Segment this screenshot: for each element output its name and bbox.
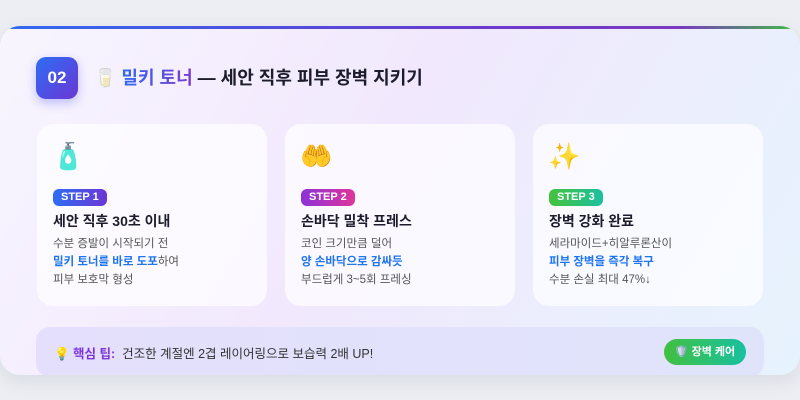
icon: palms: 🤲: [300, 141, 332, 171]
button: [664, 339, 746, 365]
step 3 text: 세라마이드+히알루론산이: [549, 238, 672, 250]
title: 🥛 밀키 토너 — 세안 직후 피부 장벽 지키기: [94, 68, 423, 88]
panel: step 3: [533, 124, 763, 306]
icon: lotion: 🧴: [52, 141, 84, 171]
step 2 text: [301, 237, 412, 286]
step 3 text: [549, 237, 672, 286]
step 3 badge: STEP 3: [557, 191, 595, 203]
step 1 text: [53, 237, 179, 286]
step 1 heading: 세안 직후 30초 이내: [53, 213, 170, 229]
step 1 badge: STEP 1: [61, 191, 99, 203]
tip text: 💡 핵심 팁: 건조한 계절엔 2겹 레이어링으로 보습력 2배 UP!: [54, 347, 373, 361]
button: 🛡️ 장벽 케어: [675, 346, 735, 358]
step 2 badge: [301, 189, 355, 206]
step 2 heading: 손바닥 밀착 프레스: [301, 213, 412, 229]
step 3 text: 수분 손실 최대 47%↓: [549, 274, 651, 286]
icon: sparkles: ✨: [548, 141, 580, 171]
panel: step 1: [37, 124, 267, 306]
step 2 text: 부드럽게 3~5회 프레싱: [301, 274, 412, 286]
number badge: 02: [48, 68, 66, 87]
step 1 text: 밀키 토너를 바로 도포하여: [53, 256, 179, 268]
step 2 badge: STEP 2: [309, 191, 347, 203]
step 3 heading: 장벽 강화 완료: [549, 213, 634, 229]
step 3 badge: [549, 189, 603, 206]
step 1 text: 수분 증발이 시작되기 전: [53, 238, 168, 250]
step 2 text: 코인 크기만큼 덜어: [301, 238, 392, 250]
step 2 text: 양 손바닥으로 감싸듯: [301, 256, 403, 268]
step 1 text: 피부 보호막 형성: [53, 274, 133, 286]
number badge: [36, 57, 78, 99]
callout: tip: [36, 327, 764, 377]
step 1 badge: [53, 189, 107, 206]
step 3 text: 피부 장벽을 즉각 복구: [549, 256, 654, 268]
panel: step 2: [285, 124, 515, 306]
